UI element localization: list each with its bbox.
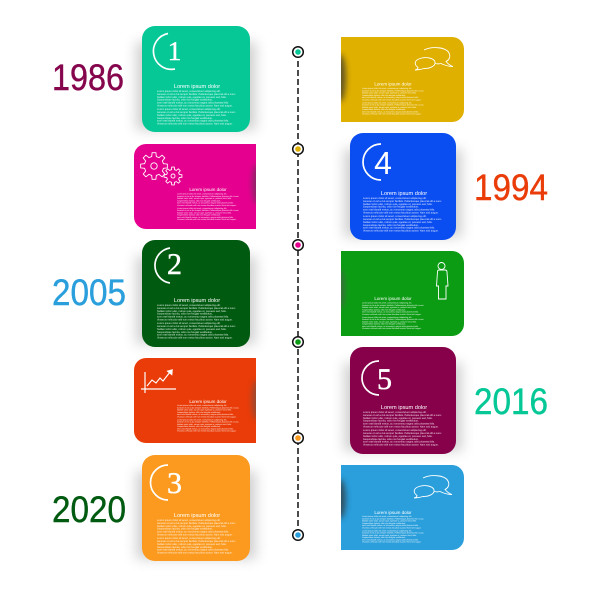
body text: Aenean et est a dui semper facilisis. Pellentesque placerat elit a nunc. — [362, 304, 424, 307]
body text: sem erat blandit metus, ac nonummy magna odio pharetra felis. — [363, 423, 435, 426]
body text: Vivamus vehicula velit non metus faucibus auctor. Nam sed augue. — [177, 204, 237, 207]
body text: Aenean et est a dui semper facilisis. Pellentesque placerat elit a nunc. — [157, 93, 236, 96]
body text: Vivamus vehicula velit non metus faucibus auctor. Nam sed augue. — [362, 526, 422, 529]
panel: card 2 dark green — [136, 240, 256, 347]
body text: Aenean et est a dui semper facilisis. Pellentesque placerat elit a nunc. — [177, 406, 239, 409]
body text: Vivamus vehicula velit non metus faucibus auctor. Nam sed augue. — [177, 218, 237, 221]
body text: Lorem ipsum dolor sit amet, consectetuer adipiscing elit. — [157, 90, 221, 93]
body text: sem erat blandit metus, ac nonummy magna odio pharetra felis. — [362, 538, 419, 541]
body text: Aenean et est a dui semper facilisis. Pellentesque placerat elit a nunc. — [362, 517, 424, 520]
panel: card green person — [335, 251, 464, 336]
panel: card gold speech bubbles — [334, 37, 464, 122]
year 2016: 2016 — [474, 381, 548, 422]
body text: Lorem ipsum dolor sit amet, consectetuer adipiscing elit. — [362, 529, 412, 532]
body text: sem erat blandit metus, ac nonummy magna odio pharetra felis. — [177, 216, 234, 219]
number badge 2: 2 — [167, 248, 182, 281]
body text: Lorem ipsum dolor sit amet, consectetuer adipiscing elit. — [157, 537, 221, 540]
body text: sem erat blandit metus, ac nonummy magna odio pharetra felis. — [157, 549, 229, 552]
body text: Vivamus vehicula velit non metus faucibus auctor. Nam sed augue. — [363, 444, 439, 447]
body text: Vivamus vehicula velit non metus faucibus auctor. Nam sed augue. — [362, 98, 422, 101]
body text: sem erat blandit metus, ac nonummy magna odio pharetra felis. — [362, 96, 419, 99]
year 1994: 1994 — [474, 167, 548, 208]
heading: Lorem ipsum dolor — [189, 399, 227, 404]
body text: Suspendisse lacinia, odio non feugiat vestibulum, — [157, 99, 213, 102]
body text: Aenean et est a dui semper facilisis. Pellentesque placerat elit a nunc. — [177, 195, 239, 198]
body text: Suspendisse lacinia, odio non feugiat vestibulum, — [362, 108, 406, 111]
body text: Vivamus vehicula velit non metus faucibus auctor. Nam sed augue. — [157, 337, 233, 340]
body text: Aenean et est a dui semper facilisis. Pellentesque placerat elit a nunc. — [363, 432, 442, 435]
icon: gears — [141, 153, 182, 185]
body text: Suspendisse lacinia, odio non feugiat vestibulum, — [157, 331, 213, 334]
body text: Nullam tortor odio, rutrum quis, egestas ut, posuere sed, felis. — [157, 310, 227, 313]
body text: Nullam tortor odio, rutrum quis, egestas ut, posuere sed, felis. — [363, 435, 433, 438]
body text: Lorem ipsum dolor sit amet, consectetuer adipiscing elit. — [362, 302, 412, 304]
body text: Suspendisse lacinia, odio non feugiat vestibulum, — [363, 224, 419, 227]
body text: sem erat blandit metus, ac nonummy magna odio pharetra felis. — [177, 413, 234, 416]
body text: Aenean et est a dui semper facilisis. Pellentesque placerat elit a nunc. — [157, 522, 236, 525]
body text: Lorem ipsum dolor sit amet, consectetuer adipiscing elit. — [363, 197, 427, 200]
body text: Aenean et est a dui semper facilisis. Pellentesque placerat elit a nunc. — [362, 532, 424, 534]
body text: Nullam tortor odio, rutrum quis, egestas ut, posuere sed, felis. — [362, 306, 417, 309]
marker 4 — [293, 337, 303, 347]
body text: Nullam tortor odio, rutrum quis, egestas ut, posuere sed, felis. — [177, 423, 232, 426]
panel: card 1 teal — [136, 26, 256, 132]
body text: Nullam tortor odio, rutrum quis, egestas ut, posuere sed, felis. — [363, 203, 433, 206]
body text: Nullam tortor odio, rutrum quis, egestas ut, posuere sed, felis. — [157, 114, 227, 117]
body text: Aenean et est a dui semper facilisis. Pellentesque placerat elit a nunc. — [362, 318, 424, 321]
body text: Lorem ipsum dolor sit amet, consectetuer adipiscing elit. — [363, 215, 427, 218]
body text: sem erat blandit metus, ac nonummy magna odio pharetra felis. — [157, 531, 229, 534]
body text: Vivamus vehicula velit non metus faucibus auctor. Nam sed augue. — [177, 415, 237, 418]
panel: card 3 orange — [136, 455, 256, 561]
body text: Suspendisse lacinia, odio non feugiat vestibulum, — [363, 420, 419, 423]
body text: sem erat blandit metus, ac nonummy magna odio pharetra felis. — [363, 209, 435, 212]
body text: Nullam tortor odio, rutrum quis, egestas ut, posuere sed, felis. — [362, 520, 417, 522]
body text: Aenean et est a dui semper facilisis. Pellentesque placerat elit a nunc. — [157, 307, 236, 310]
body text: Nullam tortor odio, rutrum quis, egestas ut, posuere sed, felis. — [362, 106, 417, 109]
body text: Suspendisse lacinia, odio non feugiat vestibulum, — [362, 322, 406, 326]
body text: sem erat blandit metus, ac nonummy magna odio pharetra felis. — [362, 310, 419, 314]
body text: Aenean et est a dui semper facilisis. Pellentesque placerat elit a nunc. — [177, 209, 239, 212]
body text: Suspendisse lacinia, odio non feugiat vestibulum, — [157, 313, 213, 316]
panel: card 4 blue — [344, 133, 462, 240]
body text: Lorem ipsum dolor sit amet, consectetuer adipiscing elit. — [157, 108, 221, 111]
panel: card red-orange chart — [134, 358, 262, 443]
body text: Vivamus vehicula velit non metus faucibus auctor. Nam sed augue. — [362, 327, 422, 330]
body text: Vivamus vehicula velit non metus faucibus auctor. Nam sed augue. — [362, 313, 422, 316]
body text: Vivamus vehicula velit non metus faucibus auctor. Nam sed augue. — [363, 230, 439, 233]
number badge 5: 5 — [377, 363, 392, 396]
body text: Nullam tortor odio, rutrum quis, egestas ut, posuere sed, felis. — [362, 534, 417, 537]
marker 3 — [293, 240, 303, 250]
marker 6 — [293, 530, 303, 540]
heading: Lorem ipsum dolor — [174, 512, 220, 519]
icon: speech bubbles — [414, 476, 452, 498]
body text: Suspendisse lacinia, odio non feugiat vestibulum, — [157, 528, 213, 531]
body text: Suspendisse lacinia, odio non feugiat vestibulum, — [177, 411, 221, 414]
icon: speech bubbles — [415, 48, 453, 70]
number badge 3: 3 — [167, 467, 182, 500]
body text: Lorem ipsum dolor sit amet, consectetuer adipiscing elit. — [177, 192, 227, 196]
body text: sem erat blandit metus, ac nonummy magna odio pharetra felis. — [362, 325, 419, 328]
body text: Suspendisse lacinia, odio non feugiat vestibulum, — [362, 536, 406, 539]
body text: Nullam tortor odio, rutrum quis, egestas ut, posuere sed, felis. — [157, 543, 227, 546]
body text: Suspendisse lacinia, odio non feugiat vestibulum, — [363, 438, 419, 441]
body text: Nullam tortor odio, rutrum quis, egestas ut, posuere sed, felis. — [157, 96, 227, 99]
body text: Vivamus vehicula velit non metus faucibus auctor. Nam sed augue. — [157, 552, 233, 555]
body text: Aenean et est a dui semper facilisis. Pellentesque placerat elit a nunc. — [362, 89, 424, 92]
marker 1 — [293, 47, 303, 57]
heading: Lorem ipsum dolor — [374, 296, 412, 301]
body text: Vivamus vehicula velit non metus faucibus auctor. Nam sed augue. — [362, 540, 422, 544]
year 2005: 2005 — [52, 272, 126, 313]
body text: Lorem ipsum dolor sit amet, consectetuer adipiscing elit. — [363, 429, 427, 432]
body text: Lorem ipsum dolor sit amet, consectetuer adipiscing elit. — [362, 101, 412, 104]
timeline: dashed axis with markers — [293, 47, 303, 540]
body text: sem erat blandit metus, ac nonummy magna odio pharetra felis. — [362, 110, 419, 113]
body text: Aenean et est a dui semper facilisis. Pellentesque placerat elit a nunc. — [363, 218, 442, 221]
body text: sem erat blandit metus, ac nonummy magna odio pharetra felis. — [157, 102, 229, 105]
body text: Aenean et est a dui semper facilisis. Pellentesque placerat elit a nunc. — [363, 414, 442, 417]
body text: Suspendisse lacinia, odio non feugiat vestibulum, — [157, 546, 213, 549]
body text: Lorem ipsum dolor sit amet, consectetuer adipiscing elit. — [177, 418, 227, 421]
body text: Lorem ipsum dolor sit amet, consectetuer adipiscing elit. — [177, 207, 227, 210]
body text: Suspendisse lacinia, odio non feugiat vestibulum, — [177, 214, 221, 216]
body text: Vivamus vehicula velit non metus faucibus auctor. Nam sed augue. — [362, 112, 422, 116]
body text: sem erat blandit metus, ac nonummy magna odio pharetra felis. — [363, 441, 435, 444]
body text: Vivamus vehicula velit non metus faucibus auctor. Nam sed augue. — [157, 318, 233, 322]
body text: Vivamus vehicula velit non metus faucibus auctor. Nam sed augue. — [177, 430, 237, 432]
body text: Suspendisse lacinia, odio non feugiat vestibulum, — [362, 94, 406, 97]
number badge 4: 4 — [374, 145, 392, 181]
body text: Lorem ipsum dolor sit amet, consectetuer adipiscing elit. — [362, 87, 412, 90]
body text: Nullam tortor odio, rutrum quis, egestas ut, posuere sed, felis. — [363, 417, 433, 420]
body text: Lorem ipsum dolor sit amet, consectetuer adipiscing elit. — [157, 519, 221, 522]
body text: Lorem ipsum dolor sit amet, consectetuer adipiscing elit. — [157, 322, 221, 325]
body text: Nullam tortor odio, rutrum quis, egestas ut, posuere sed, felis. — [157, 525, 227, 528]
heading: Lorem ipsum dolor — [174, 83, 220, 90]
body text: Aenean et est a dui semper facilisis. Pellentesque placerat elit a nunc. — [363, 200, 442, 203]
body text: Lorem ipsum dolor sit amet, consectetuer adipiscing elit. — [363, 411, 427, 414]
body text: Suspendisse lacinia, odio non feugiat vestibulum, — [363, 206, 419, 209]
heading: Lorem ipsum dolor — [189, 187, 227, 192]
heading: Lorem ipsum dolor — [381, 404, 427, 411]
body text: Aenean et est a dui semper facilisis. Pellentesque placerat elit a nunc. — [157, 111, 236, 114]
heading: Lorem ipsum dolor — [381, 190, 427, 197]
body text: Nullam tortor odio, rutrum quis, egestas ut, posuere sed, felis. — [177, 197, 232, 200]
body text: Lorem ipsum dolor sit amet, consectetuer adipiscing elit. — [362, 316, 412, 319]
heading: Lorem ipsum dolor — [174, 297, 220, 304]
body text: Nullam tortor odio, rutrum quis, egestas ut, posuere sed, felis. — [362, 320, 417, 323]
body text: Nullam tortor odio, rutrum quis, egestas ut, posuere sed, felis. — [362, 92, 417, 94]
number badge 1: 1 — [168, 36, 181, 66]
body text: Suspendisse lacinia, odio non feugiat vestibulum, — [362, 522, 406, 525]
icon: growth chart — [141, 370, 176, 393]
body text: sem erat blandit metus, ac nonummy magna odio pharetra felis. — [157, 316, 229, 319]
body text: Nullam tortor odio, rutrum quis, egestas ut, posuere sed, felis. — [177, 408, 232, 412]
body text: Aenean et est a dui semper facilisis. Pellentesque placerat elit a nunc. — [177, 420, 239, 424]
body text: Suspendisse lacinia, odio non feugiat vestibulum, — [362, 308, 406, 311]
body text: Suspendisse lacinia, odio non feugiat vestibulum, — [177, 199, 221, 202]
body text: Vivamus vehicula velit non metus faucibus auctor. Nam sed augue. — [363, 426, 439, 428]
marker 5 — [293, 433, 303, 443]
body text: Vivamus vehicula velit non metus faucibus auctor. Nam sed augue. — [157, 123, 233, 126]
body text: Aenean et est a dui semper facilisis. Pellentesque placerat elit a nunc. — [362, 104, 424, 106]
panel: card sky blue speech bubbles — [334, 465, 464, 550]
body text: Lorem ipsum dolor sit amet, consectetuer adipiscing elit. — [177, 404, 227, 407]
body text: Lorem ipsum dolor sit amet, consectetuer adipiscing elit. — [157, 304, 221, 307]
body text: Suspendisse lacinia, odio non feugiat vestibulum, — [157, 117, 213, 120]
icon: person — [436, 262, 448, 299]
heading: Lorem ipsum dolor — [374, 82, 412, 86]
body text: sem erat blandit metus, ac nonummy magna odio pharetra felis. — [177, 202, 234, 204]
marker 2 — [293, 144, 303, 154]
body text: Vivamus vehicula velit non metus faucibus auctor. Nam sed augue. — [157, 104, 233, 108]
body text: sem erat blandit metus, ac nonummy magna odio pharetra felis. — [363, 227, 435, 230]
panel: card magenta gears — [134, 144, 262, 229]
body text: Nullam tortor odio, rutrum quis, egestas ut, posuere sed, felis. — [177, 211, 232, 214]
body text: Vivamus vehicula velit non metus faucibus auctor. Nam sed augue. — [157, 534, 233, 536]
panel: card 5 purple — [344, 347, 462, 454]
body text: Aenean et est a dui semper facilisis. Pellentesque placerat elit a nunc. — [157, 325, 236, 328]
body text: Nullam tortor odio, rutrum quis, egestas ut, posuere sed, felis. — [157, 328, 227, 331]
body text: Suspendisse lacinia, odio non feugiat vestibulum, — [177, 425, 221, 428]
body text: sem erat blandit metus, ac nonummy magna odio pharetra felis. — [157, 334, 229, 337]
heading: Lorem ipsum dolor — [374, 510, 412, 515]
body text: Lorem ipsum dolor sit amet, consectetuer adipiscing elit. — [362, 515, 412, 518]
body text: Vivamus vehicula velit non metus faucibus auctor. Nam sed augue. — [363, 212, 439, 214]
year 1986: 1986 — [52, 57, 124, 98]
body text: Nullam tortor odio, rutrum quis, egestas ut, posuere sed, felis. — [363, 221, 433, 224]
body text: sem erat blandit metus, ac nonummy magna odio pharetra felis. — [177, 427, 234, 430]
year 2020: 2020 — [52, 489, 126, 530]
body text: Aenean et est a dui semper facilisis. Pellentesque placerat elit a nunc. — [157, 540, 236, 543]
body text: sem erat blandit metus, ac nonummy magna odio pharetra felis. — [362, 524, 419, 527]
body text: sem erat blandit metus, ac nonummy magna odio pharetra felis. — [157, 120, 229, 123]
